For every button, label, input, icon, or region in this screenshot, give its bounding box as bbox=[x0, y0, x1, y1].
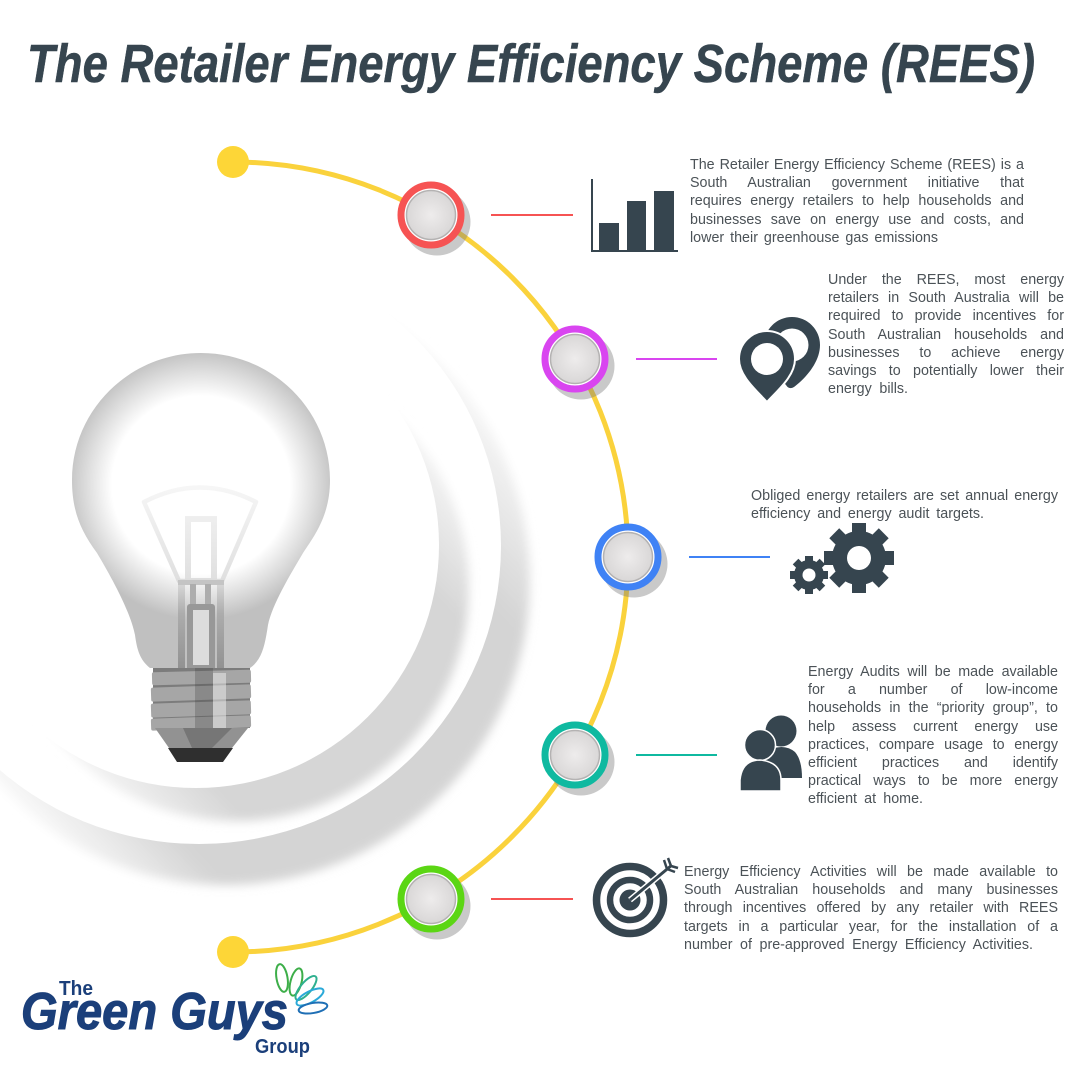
text block 1: lower their greenhouse gas emissions bbox=[690, 230, 938, 246]
light bulb bbox=[72, 353, 330, 762]
text block 5: number of pre-approved Energy Efficiency Activities. bbox=[684, 937, 1033, 953]
text block 4: Energy Audits will be made available bbox=[808, 664, 1058, 680]
text block 3: efficiency and energy audit targets. bbox=[751, 506, 984, 522]
logo: The Green Guys Group: The bbox=[59, 978, 93, 1000]
logo: The Green Guys Group bbox=[21, 963, 328, 1058]
text block 2: Under the REES, most energy bbox=[828, 272, 1064, 288]
text block 1: The Retailer Energy Efficiency Scheme (REES) is a bbox=[690, 157, 1024, 173]
text block 4: efficient practices and identify bbox=[808, 755, 1058, 771]
node 4: teal bbox=[545, 725, 614, 796]
icon: people bbox=[740, 716, 802, 791]
arc start dot bbox=[217, 146, 249, 178]
arc end dot bbox=[217, 936, 249, 968]
icon: map pins bbox=[739, 317, 820, 402]
text block 5: through incentives offered by any retailer with REES bbox=[684, 900, 1058, 916]
text block 2: energy bills. bbox=[828, 381, 908, 397]
icon: gears bbox=[790, 523, 894, 594]
connector 5 bbox=[491, 898, 573, 900]
node 5: green bbox=[401, 869, 470, 940]
text block 4: help assess current energy use bbox=[808, 719, 1058, 735]
node 2: magenta bbox=[545, 329, 614, 400]
small gear bbox=[790, 556, 828, 594]
text block 1 bbox=[690, 157, 1024, 246]
icon: bar chart bbox=[591, 179, 678, 252]
text block 2: savings to potentially lower their bbox=[828, 363, 1064, 379]
connector 2 bbox=[636, 358, 717, 360]
text block 1: South Australian government initiative that bbox=[690, 175, 1024, 191]
text block 5: Energy Efficiency Activities will be made available to bbox=[684, 864, 1058, 880]
text block 4: households in the “priority group”, to bbox=[808, 700, 1058, 716]
text block 2 bbox=[828, 272, 1064, 397]
text block 2: businesses to achieve energy bbox=[828, 345, 1064, 361]
text block 4: for a number of low-income bbox=[808, 682, 1058, 698]
text block 4: practices, compare usage to energy bbox=[808, 737, 1058, 753]
logo: The Green Guys Group: Group bbox=[255, 1036, 310, 1058]
text block 4: efficient at home. bbox=[808, 791, 923, 807]
logo: The Green Guys Group: Green Guys bbox=[21, 983, 288, 1041]
text block 5: targets in a particular year, for the installation of a bbox=[684, 919, 1058, 935]
node 1: red bbox=[401, 185, 470, 256]
text block 5 bbox=[684, 864, 1058, 953]
big gear bbox=[824, 523, 894, 593]
text block 1: businesses save on energy use and costs, and bbox=[690, 212, 1024, 228]
icon: target with arrow bbox=[596, 858, 678, 934]
node 3: blue bbox=[598, 527, 668, 598]
text block 1: requires energy retailers to help households and bbox=[690, 193, 1024, 209]
logo feathers bbox=[274, 963, 328, 1015]
text block 2: required to provide incentives for bbox=[828, 308, 1064, 324]
text block 2: South Australian households and bbox=[828, 327, 1064, 343]
yellow arc timeline bbox=[217, 146, 628, 952]
text block 5: South Australian households and many businesses bbox=[684, 882, 1058, 898]
text block 2: retailers in South Australia will be bbox=[828, 290, 1064, 306]
connector 4 bbox=[636, 754, 717, 756]
decorative swoosh crescents behind bulb bbox=[0, 248, 530, 885]
connector 3 bbox=[689, 556, 770, 558]
text block 4 bbox=[808, 664, 1058, 807]
text block 3 bbox=[751, 488, 1058, 522]
text block 3: Obliged energy retailers are set annual energy bbox=[751, 488, 1058, 504]
connector 1 bbox=[491, 214, 573, 216]
text block 4: practical ways to be more energy bbox=[808, 773, 1058, 789]
